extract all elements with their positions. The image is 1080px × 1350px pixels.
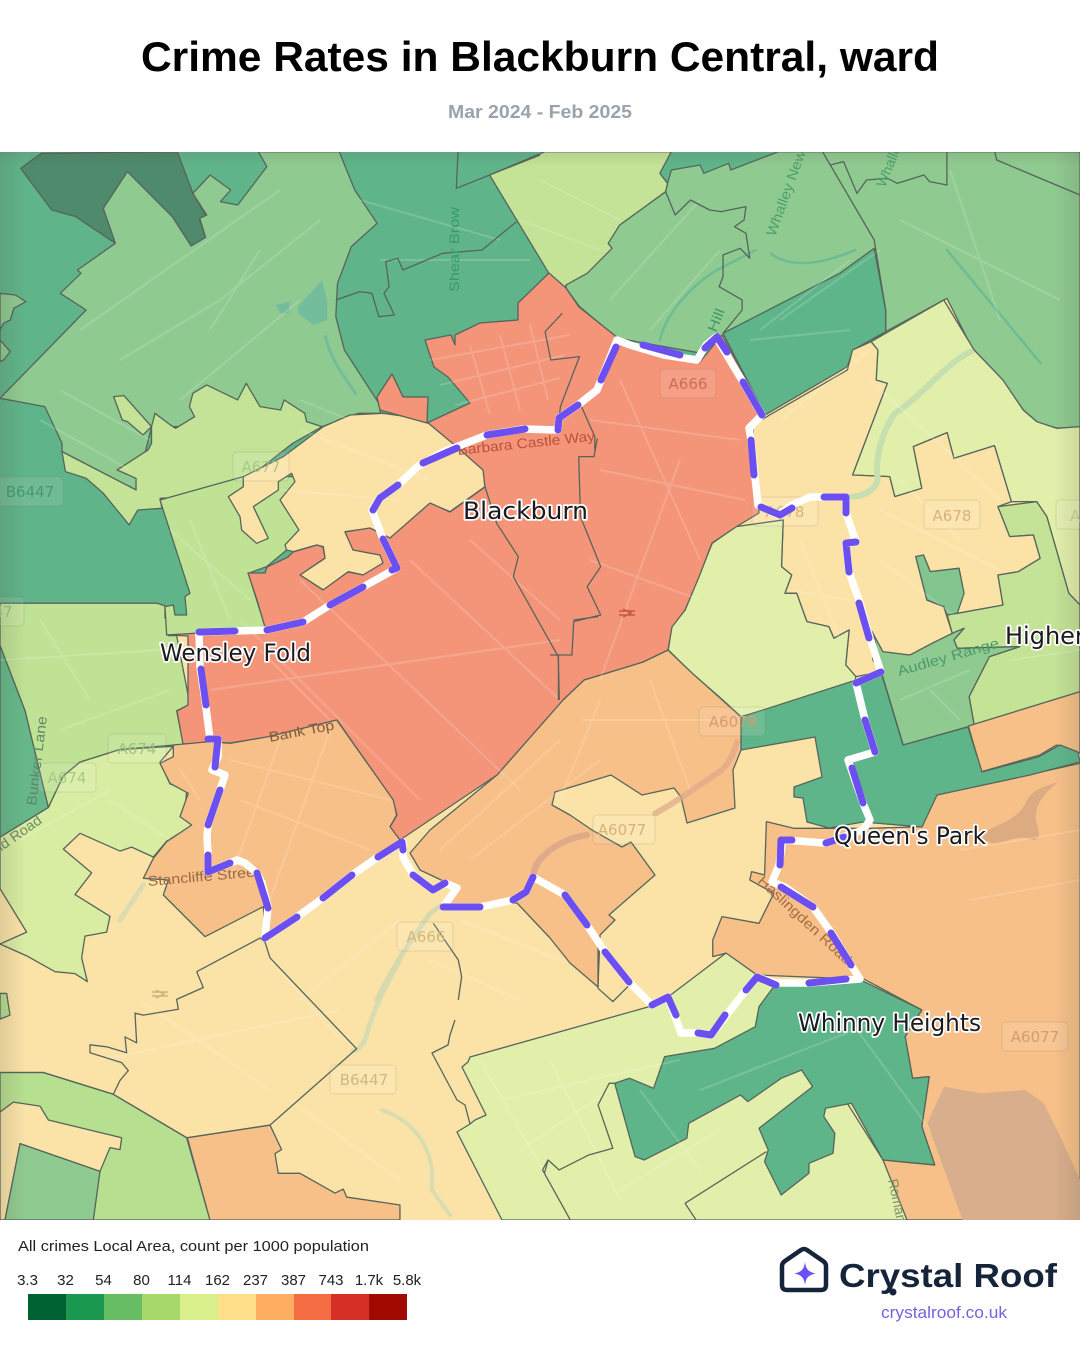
legend tick labels: 32 bbox=[57, 1272, 74, 1289]
logo keyhole detail bbox=[890, 1288, 896, 1296]
road number chips: A677 bbox=[242, 458, 280, 476]
road number chips bbox=[0, 369, 1080, 1094]
title: Crime Rates in Blackburn Central, ward bbox=[141, 33, 939, 80]
place labels: Blackburn bbox=[463, 497, 588, 525]
legend tick labels bbox=[17, 1272, 422, 1289]
map base colour bbox=[0, 299, 1080, 1220]
place labels: Wensley Fold bbox=[160, 639, 311, 667]
regions: east of ward bbox=[668, 300, 1080, 745]
regions: west of ward bbox=[0, 413, 485, 1019]
legend tick labels: 5.8k bbox=[393, 1272, 422, 1289]
icon: house with star bbox=[782, 1249, 826, 1290]
street name labels: Stancliffe Street bbox=[147, 863, 260, 889]
legend: crime rate scale bbox=[17, 1239, 422, 1320]
street name labels: Hill bbox=[704, 306, 728, 334]
place labels: Queen's Park bbox=[834, 822, 986, 850]
legend colour bar bbox=[28, 1294, 407, 1320]
legend tick labels: 3.3 bbox=[17, 1272, 38, 1289]
road network texture bbox=[0, 170, 1080, 1200]
subtitle: date range: Mar 2024 - Feb 2025 bbox=[448, 102, 632, 122]
regions: north-west greens bbox=[0, 152, 776, 614]
street name labels: Barbara Castle Way bbox=[457, 428, 596, 458]
icon: railway station, south-west bbox=[152, 990, 168, 998]
road number chips: A6077 bbox=[1011, 1028, 1059, 1046]
legend tick labels: 162 bbox=[205, 1272, 230, 1289]
regions: south-west bbox=[0, 1073, 400, 1220]
legend tick labels: 54 bbox=[95, 1272, 112, 1289]
legend tick labels: 387 bbox=[281, 1272, 306, 1289]
road number chips: A674 bbox=[118, 740, 156, 758]
street name labels bbox=[0, 137, 1001, 1224]
regions: central salmon high-crime area bbox=[143, 273, 765, 987]
canals and water features bbox=[120, 250, 1041, 1215]
street name labels: Whalley bbox=[873, 137, 907, 189]
road number chips: B6447 bbox=[340, 1071, 388, 1089]
regions: north-east greens bbox=[490, 152, 1080, 430]
road number chips: A6078 bbox=[709, 713, 757, 731]
logo: Crystal Roof bbox=[782, 1249, 1058, 1322]
road number chips: A6077 bbox=[598, 821, 646, 839]
place labels bbox=[160, 497, 1080, 1037]
legend tick labels: 1.7k bbox=[355, 1272, 384, 1289]
logo wordmark: Crystal Roof bbox=[839, 1257, 1058, 1294]
road number chips: B6447 bbox=[6, 483, 54, 501]
street name labels: Audley Range bbox=[895, 634, 1001, 679]
street name labels: Haslingden Road bbox=[755, 872, 855, 967]
road number chips: A666 bbox=[407, 928, 445, 946]
road number chips: A678 bbox=[766, 503, 804, 521]
street name labels: Bank Top bbox=[268, 717, 336, 745]
street name labels: Bunker Lane bbox=[23, 715, 50, 806]
street name labels: Shear Brow bbox=[446, 206, 462, 292]
legend tick labels: 237 bbox=[243, 1272, 268, 1289]
road number chips: A674 bbox=[48, 769, 86, 787]
interior ward and parish boundaries bbox=[0, 152, 1080, 1220]
place labels: Whinny Heights bbox=[798, 1009, 981, 1037]
regions: south-east orange and green bbox=[457, 672, 1080, 1220]
legend title: All crimes Local Area, count per 1000 population bbox=[18, 1239, 369, 1255]
legend tick labels: 114 bbox=[168, 1272, 191, 1289]
road number chips: A666 bbox=[669, 375, 707, 393]
edge vignette bbox=[0, 152, 1080, 1220]
street name labels: Whalley New bbox=[763, 147, 809, 238]
legend tick labels: 743 bbox=[318, 1272, 344, 1289]
icon: railway station, central bbox=[619, 609, 635, 617]
website url: crystalroof.co.uk bbox=[881, 1304, 1008, 1322]
ward boundary: Blackburn Central bbox=[199, 337, 881, 1035]
street name labels: Roman bbox=[885, 1177, 910, 1224]
legend tick labels: 80 bbox=[133, 1272, 150, 1289]
road number chips: A678 bbox=[933, 507, 971, 525]
